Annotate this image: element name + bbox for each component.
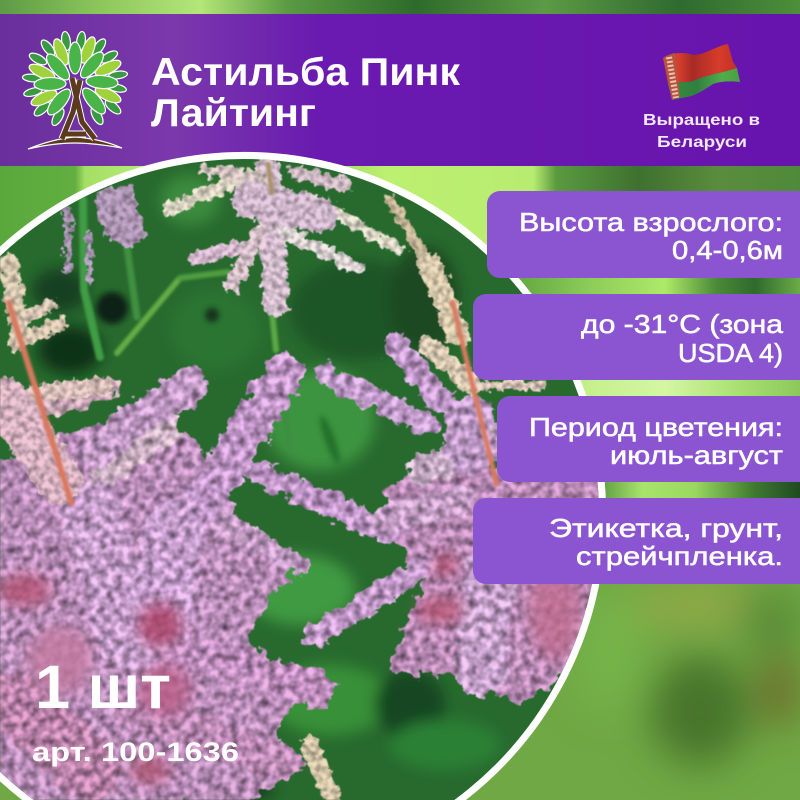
dark rose shadows in left plume <box>0 574 191 784</box>
panel: package: Этикетка, грунт, <box>549 513 783 543</box>
stems <box>83 200 290 800</box>
top pale plume <box>168 168 400 303</box>
foliage <box>32 175 500 800</box>
panel: flowering period <box>497 396 800 482</box>
icon: Belarus flag <box>663 44 740 100</box>
made in Belarus label: Выращено в <box>643 112 760 129</box>
title: Астильба Пинк <box>151 51 460 94</box>
logo: tree <box>22 31 128 149</box>
panel: hardiness: до -31°С (зона <box>581 309 784 339</box>
roots and trunk <box>28 78 122 149</box>
panel: package: стрейчпленка. <box>576 541 783 571</box>
panel: height <box>487 191 800 278</box>
left cream spike <box>5 262 105 480</box>
made in Belarus label <box>643 112 760 151</box>
panel: package <box>473 498 800 584</box>
bottom cream spike <box>310 745 332 797</box>
round photo of astilbe <box>0 152 606 800</box>
panel: height: Высота взрослого: <box>519 207 783 237</box>
title <box>151 51 460 135</box>
quantity: 1 шт <box>35 653 171 721</box>
made in Belarus label: Беларуси <box>657 134 747 151</box>
header band <box>0 14 800 166</box>
top green strip <box>0 0 800 15</box>
panel: hardiness: USDA 4) <box>678 338 783 368</box>
panel: flowering period: июль-август <box>610 440 783 470</box>
panel: height: 0,4-0,6м <box>672 235 783 265</box>
right cream spike <box>389 198 540 385</box>
faded back plume <box>68 185 148 280</box>
right plume <box>258 345 600 700</box>
left big plume <box>0 372 315 800</box>
panel: flowering period: Период цветения: <box>529 412 783 442</box>
panel: hardiness <box>473 294 800 380</box>
article number: арт. 100-1636 <box>32 737 239 767</box>
title: Лайтинг <box>151 92 316 135</box>
